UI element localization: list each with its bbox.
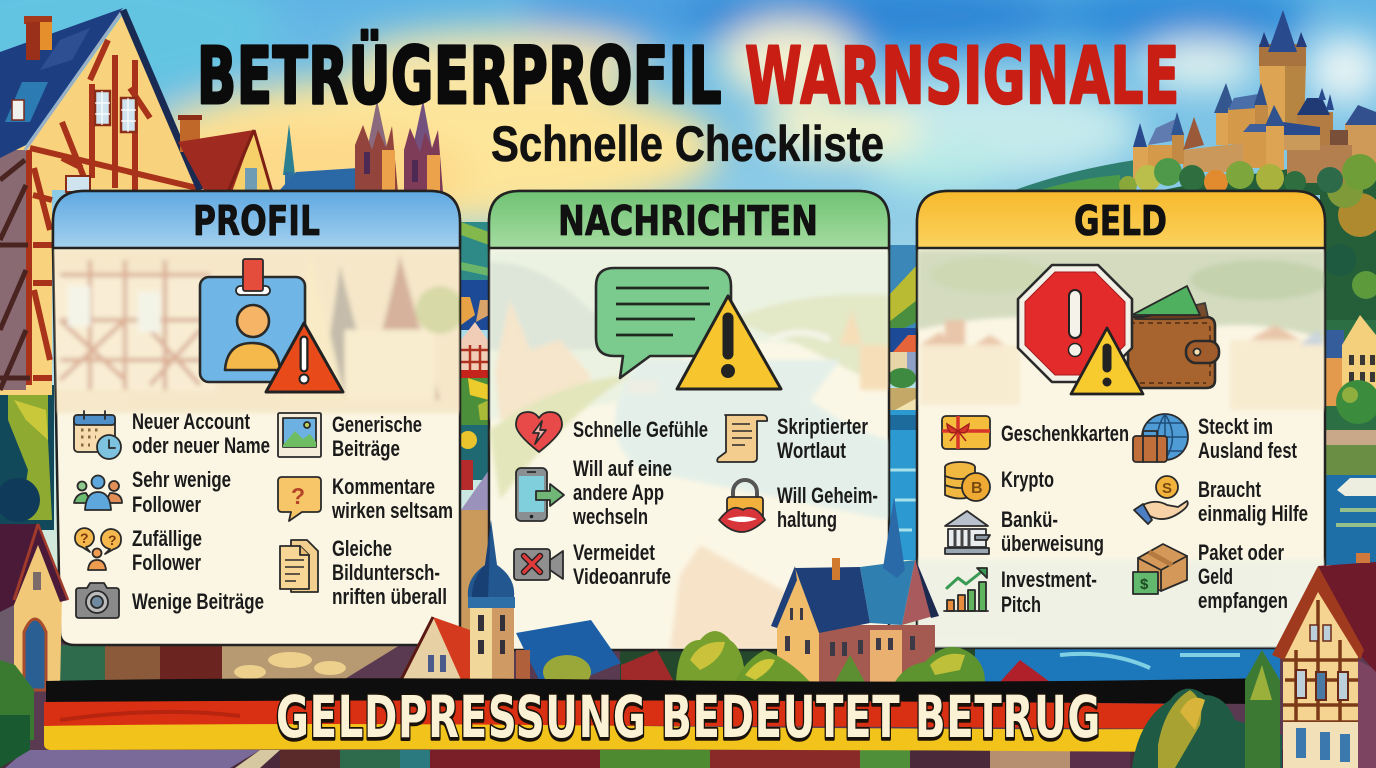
red-roofed neighbour house [178,115,272,192]
red roof [621,650,674,682]
hilltop castle [1119,10,1376,194]
item: Geschenkkarten: Geschenkkarten [1001,421,1129,446]
item: Will Geheimhaltung: haltung [777,507,837,532]
flag stripes [44,678,1272,752]
icon: speech bubble with warning triangle [596,268,781,389]
item: Banküberweisung [945,507,1104,556]
item: Braucht einmalig Hilfe: Braucht [1198,477,1262,502]
item: Will Geheimhaltung: Will Geheim- [777,483,878,508]
item: Gleiche Bildunterschriften überall: Bilduntersch- [332,560,440,585]
gap left of panel 2 [461,222,489,282]
item: Investment-Pitch: Investment- [1001,567,1097,592]
item: Neuer Account oder neuer Name: oder neuer Name [132,433,270,458]
item: Generische Beiträge: Generische [332,412,422,437]
item: Kommentare wirken seltsam [278,474,453,523]
tan manor house [771,497,939,682]
item: Generische Beiträge: Beiträge [332,436,400,461]
church spire and cathedral [278,100,443,192]
item: Krypto [945,462,1054,501]
item: Wenige Beiträge [76,583,264,618]
item: Gleiche Bildunterschriften überall: nriften überall [332,584,447,609]
left strip tree [0,385,54,530]
red gabled house [400,618,470,682]
item: Skriptierter Wortlaut [717,414,868,463]
right strip scenery [1326,320,1376,435]
item: Will auf eine andere App wechseln [516,456,672,529]
title: BETRÜGERPROFIL [197,30,722,122]
item: Investment-Pitch [944,567,1097,617]
left half-timbered house [0,8,200,395]
ground below panels [0,640,1376,768]
item: Vermeidet Videoanrufe: Vermeidet [573,540,656,565]
item: Krypto: Krypto [1001,467,1054,492]
item: Braucht einmalig Hilfe: einmalig Hilfe [1198,501,1308,526]
item: Banküberweisung: überweisung [1001,531,1104,556]
church tower with onion spire [468,520,515,683]
item: Banküberweisung: Bankü- [1001,507,1058,532]
item: Vermeidet Videoanrufe: Videoanrufe [573,564,671,589]
icon: ID badge with warning triangle [200,259,343,392]
panel: Nachrichten [489,191,889,650]
item: Skriptierter Wortlaut: Skriptierter [777,414,868,439]
bottom-left chapel [0,524,68,768]
icon: stop sign, wallet and warning triangle [1018,265,1219,394]
item: Braucht einmalig Hilfe [1134,476,1308,526]
gap right of panel 2 [889,245,917,335]
foreground buildings and trees overlapping the panels [0,497,1376,768]
panel header: Geld [917,191,1325,248]
item: Zufällige Follower: Follower [132,550,201,575]
heading: Geld: GELD [1074,197,1167,245]
item: Zufällige Follower [75,526,202,575]
item: Wenige Beiträge: Wenige Beiträge [132,589,264,614]
item: Will Geheimhaltung [719,480,878,532]
item: Sehr wenige Follower: Sehr wenige [132,467,231,492]
item: Will auf eine andere App wechseln: andere App [573,480,664,505]
blue roof [516,620,621,682]
item: Will auf eine andere App wechseln: wechseln [572,504,648,529]
item: Paket oder Geld empfangen: empfangen [1198,588,1288,613]
panel: Geld [917,191,1330,650]
item: Steckt im Ausland fest: Steckt im [1198,414,1273,439]
item: Zufällige Follower: Zufällige [132,526,202,551]
item: Gleiche Bildunterschriften überall: Gleiche [332,536,392,561]
item: Schnelle Gefühle [516,412,708,452]
heading: Nachrichten: NACHRICHTEN [558,197,818,245]
foreground tree over banner [1132,650,1282,768]
item: Gleiche Bildunterschriften überall [280,536,447,609]
panel header: Profil [53,191,460,248]
banner: German flag with slogan [44,678,1272,752]
right forest strip [1140,160,1376,320]
item: Kommentare wirken seltsam: wirken seltsam [331,498,453,523]
item: Steckt im Ausland fest: Ausland fest [1198,438,1297,463]
trees [676,631,985,682]
ground below banner [0,750,1376,768]
item: Neuer Account oder neuer Name: Neuer Account [132,409,251,434]
panel: Profil [53,191,464,645]
item: Paket oder Geld empfangen: Paket oder [1198,540,1284,565]
item: Steckt im Ausland fest [1133,414,1297,463]
item: Sehr wenige Follower [74,467,231,517]
item: Kommentare wirken seltsam: Kommentare [332,474,435,499]
item: Paket oder Geld empfangen: Geld [1198,564,1233,589]
item: Paket oder Geld empfangen [1133,540,1288,613]
item: Skriptierter Wortlaut: Wortlaut [777,438,847,463]
item: Geschenkkarten [942,416,1129,449]
item: Sehr wenige Follower: Follower [132,492,201,517]
item: Braucht einmalig Hilfe: S [1162,480,1172,497]
bottom-right half-timbered house [1272,553,1376,768]
heading: Profil: PROFIL [193,197,320,245]
item: Zufällige Follower: ? [108,532,117,548]
item: Krypto: B [971,480,983,497]
hills and river behind panels [1015,160,1135,195]
item: Schnelle Gefühle: Schnelle Gefühle [573,417,708,442]
panel header: Nachrichten [489,191,889,248]
item: Investment-Pitch: Pitch [1001,592,1041,617]
item: Will auf eine andere App wechseln: Will auf eine [573,456,672,481]
item: Neuer Account oder neuer Name [74,409,270,459]
item: Generische Beiträge [278,412,422,461]
item: Vermeidet Videoanrufe [514,540,671,589]
item: Zufällige Follower: ? [80,530,89,546]
item: Kommentare wirken seltsam: ? [291,483,305,509]
subtitle: Schnelle Checkliste [491,116,884,172]
item: Paket oder Geld empfangen: $ [1140,576,1149,593]
